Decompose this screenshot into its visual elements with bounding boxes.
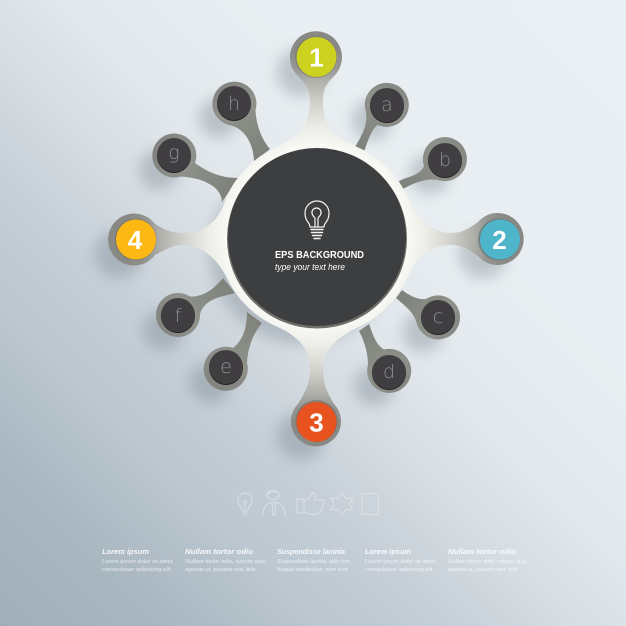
icon: bulb (238, 493, 252, 514)
node h (217, 86, 251, 121)
icon: document (362, 494, 378, 514)
small satellite stalks (152, 82, 467, 393)
node g (157, 138, 191, 173)
stalk f (156, 278, 235, 337)
icon: person (263, 490, 285, 515)
node 3 (296, 400, 338, 442)
centre subtitle: type your text here (275, 262, 345, 272)
caption 1 (102, 547, 174, 573)
node 4: 4 (128, 225, 143, 255)
node a: a (381, 94, 393, 116)
node 1: 1 (309, 42, 324, 72)
node e (209, 350, 243, 385)
node g: g (168, 142, 180, 164)
stalk a (355, 83, 409, 152)
caption 1: Lorem ipsum dolor sit amet, (102, 559, 174, 565)
caption columns (102, 547, 528, 573)
node 2 (478, 218, 520, 260)
node f (161, 298, 195, 333)
caption 2: Nullam tortor odio (185, 547, 253, 556)
caption 4: Lorem ipsum dolor sit amet, (365, 559, 437, 565)
stalk h (212, 82, 270, 162)
caption 5 (448, 547, 528, 573)
caption 3: Suspendisse lacinia, odio non (277, 559, 350, 565)
caption 4: Lorem ipsum (365, 547, 411, 556)
caption 2: Nullam tortor odio, rutrum quis, (185, 559, 267, 565)
stalk b (397, 137, 467, 189)
centre panel (227, 148, 407, 328)
node d: d (383, 361, 395, 383)
caption 5: egestas ut, posuere sed, felis. (448, 567, 519, 573)
caption 1: Lorem ipsum (102, 547, 149, 556)
node 1 (295, 36, 337, 78)
caption 3 (277, 547, 350, 573)
caption 1: consectetuer adipiscing elit. (102, 567, 172, 573)
node 3: 3 (309, 408, 324, 438)
caption 4 (365, 547, 437, 573)
centre heading: EPS BACKGROUND (275, 250, 364, 261)
icon: star (331, 493, 353, 515)
drop shadows of the diagram (95, 48, 507, 460)
node b: b (439, 149, 451, 171)
caption 4: consectetuer adipiscing elit. (365, 567, 434, 573)
node f: f (175, 305, 182, 327)
stalk d (359, 324, 411, 393)
node a (370, 88, 404, 123)
stalk e (204, 312, 262, 391)
node e: e (220, 356, 232, 378)
caption 2: egestas ut, posuere sed, felis. (185, 567, 257, 573)
stalk c (396, 290, 460, 339)
node 4 (114, 218, 156, 260)
node b (428, 143, 462, 178)
caption 3: feugiat vestibulum, sem erat. (277, 567, 349, 573)
caption 5: Nullam tortor odio (448, 547, 516, 556)
icon: light bulb (305, 201, 329, 238)
stalk g (152, 134, 238, 202)
node 2: 2 (492, 225, 507, 255)
node d (372, 355, 406, 390)
icon row (238, 490, 378, 515)
icon: thumbs up (297, 493, 324, 514)
node h: h (228, 93, 240, 115)
node c (421, 300, 455, 335)
central light body with four arms (108, 31, 524, 446)
node c: c (433, 306, 443, 328)
caption 2 (185, 547, 267, 573)
caption 3: Suspendisse lacinia (277, 547, 345, 556)
caption 5: Nullam tortor odio, rutrum quis, (448, 559, 528, 565)
